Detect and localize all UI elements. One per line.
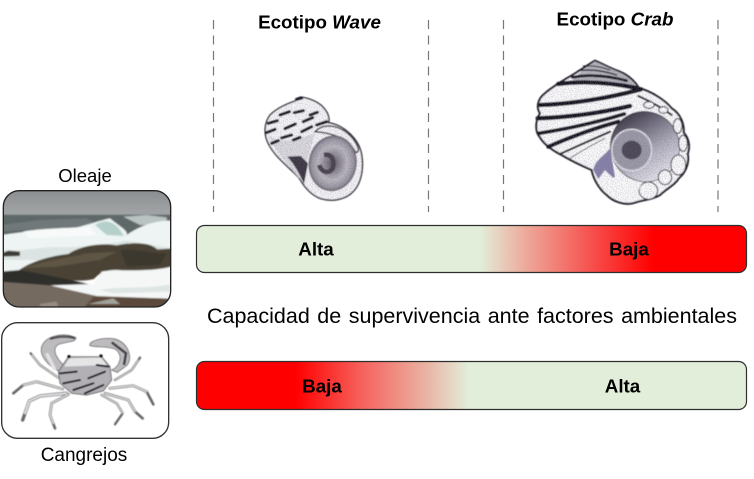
photo: waves breaking on rocks [0, 190, 173, 308]
icon: crab illustration panel [2, 323, 169, 438]
label: Alta: Alta [605, 376, 641, 396]
label: Baja: Baja [609, 238, 649, 260]
label: Baja: Baja [302, 376, 342, 396]
bar: upper survival gradient, Alta to Baja [196, 226, 746, 272]
icon: Crab ecotype snail shell [536, 61, 691, 204]
heading: Ecotipo Crab: Ecotipo Crab [557, 8, 673, 30]
heading: Ecotipo Wave: Ecotipo Wave [258, 12, 381, 32]
label: Alta: Alta [298, 238, 334, 260]
label: Cangrejos: Cangrejos [41, 445, 127, 466]
bar: lower survival gradient, Baja to Alta [196, 362, 746, 410]
label: Oleaje: Oleaje [58, 165, 112, 186]
icon: Wave ecotype snail shell [265, 97, 362, 200]
text: central caption: Capacidad de supervivencia ante factores ambientales [207, 305, 737, 328]
